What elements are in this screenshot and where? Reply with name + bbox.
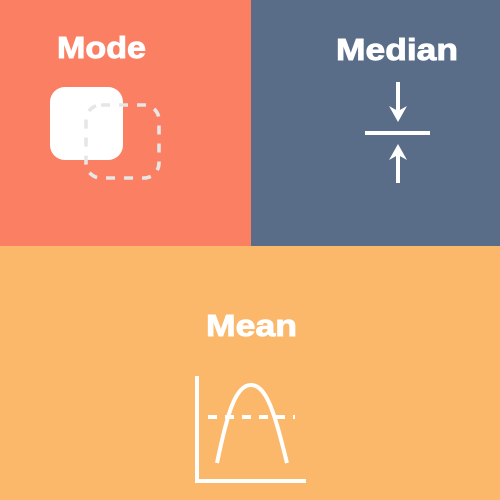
heading: Median: Median [336, 32, 458, 67]
panel: median [251, 0, 500, 246]
panel: mode [0, 0, 251, 246]
icon: bell curve chart [197, 376, 306, 481]
panel: mean [0, 246, 500, 500]
icon: overlapping squares [50, 87, 159, 178]
icon: arrows converging on line [365, 82, 430, 183]
heading: Mean: Mean [206, 308, 297, 343]
heading: Mode: Mode [57, 30, 146, 65]
